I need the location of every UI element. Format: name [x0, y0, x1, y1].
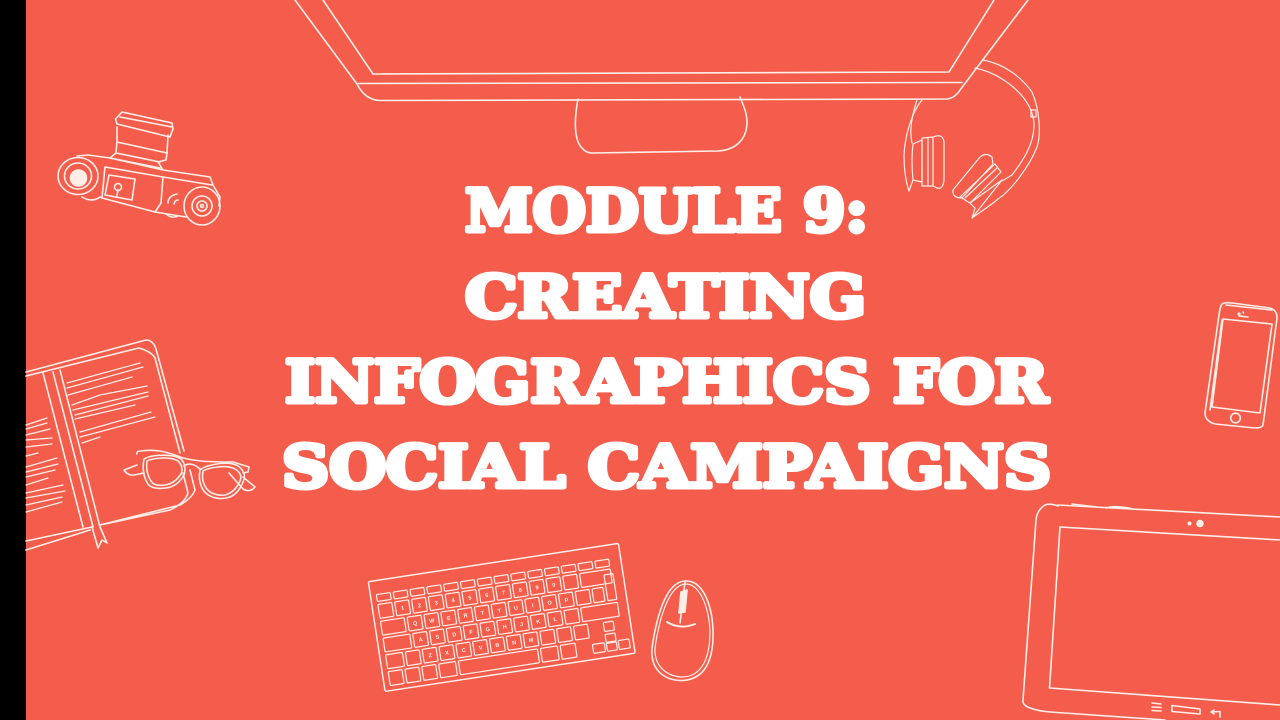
keys: number row: 8: [518, 588, 522, 594]
title line 2: CREATING: [465, 263, 866, 331]
keys: bottom letter row: M: [528, 637, 534, 644]
icon: monitor: [295, 0, 1028, 153]
keys: QWERTY row: I: [532, 603, 535, 609]
keys: bottom letter row: V: [478, 645, 483, 652]
keys: bottom letter row: N: [512, 640, 517, 647]
keys: home row: F: [469, 629, 474, 636]
title line 3: INFOGRAPHICS FOR: [285, 348, 1049, 416]
keys: number row: 3: [434, 600, 438, 607]
icon: smartphone: [1205, 303, 1277, 428]
keys: home row: S: [435, 635, 440, 641]
icon: tablet: [1023, 504, 1280, 720]
keys: number row: 1: [401, 606, 405, 612]
keys: QWERTY row: Y: [497, 608, 502, 614]
keys: bottom letter row: X: [445, 650, 450, 657]
keys: QWERTY row: E: [447, 616, 451, 622]
keys: QWERTY row: U: [514, 605, 519, 612]
title line 4: SOCIAL CAMPAIGNS: [282, 433, 1051, 501]
keys: bottom letter row: [386, 620, 615, 669]
keys: function row: [376, 559, 610, 602]
icon: headphones: [904, 60, 1039, 218]
keys: number row: 5: [468, 595, 472, 602]
keys: home row: H: [502, 624, 507, 631]
icon: notebook: [26, 340, 195, 550]
keys: number row: 9: [535, 585, 539, 591]
keys: QWERTY row: Q: [413, 621, 419, 627]
keys: number row: [378, 569, 612, 618]
keys: QWERTY row: P: [564, 598, 569, 604]
keys: home row: L: [553, 617, 558, 623]
keys: home row: J: [520, 622, 524, 628]
title: [282, 177, 1051, 501]
keys: home row: A: [418, 637, 423, 644]
keys: home row: D: [452, 632, 457, 639]
keys: home row: G: [485, 627, 491, 633]
keys: bottom letter row: Z: [428, 653, 433, 659]
title line 1: MODULE 9:: [465, 177, 868, 245]
keys: number row: 2: [418, 603, 422, 609]
keys: QWERTY row: R: [463, 613, 468, 620]
keys: QWERTY row: W: [429, 618, 436, 625]
keys: QWERTY row: T: [480, 610, 485, 617]
icon: camera: [58, 112, 220, 225]
icon: glasses: [124, 450, 255, 499]
keys: QWERTY row: O: [547, 600, 553, 607]
keys: number row: 0: [552, 582, 556, 589]
keys: bottom letter row: B: [495, 643, 500, 649]
keys: number row: 4: [451, 598, 456, 604]
icon: keyboard: [368, 543, 635, 691]
icon: mouse: [652, 581, 713, 681]
keys: QWERTY row: [379, 574, 617, 635]
keys: home row: K: [536, 619, 541, 626]
keys: bottom letter row: C: [461, 648, 466, 654]
keys: spacebar row: [388, 631, 630, 686]
left black bar: [0, 0, 26, 720]
keys: number row: 6: [485, 593, 489, 599]
keys: number row: 7: [502, 590, 506, 597]
keys: home row: [383, 602, 619, 652]
